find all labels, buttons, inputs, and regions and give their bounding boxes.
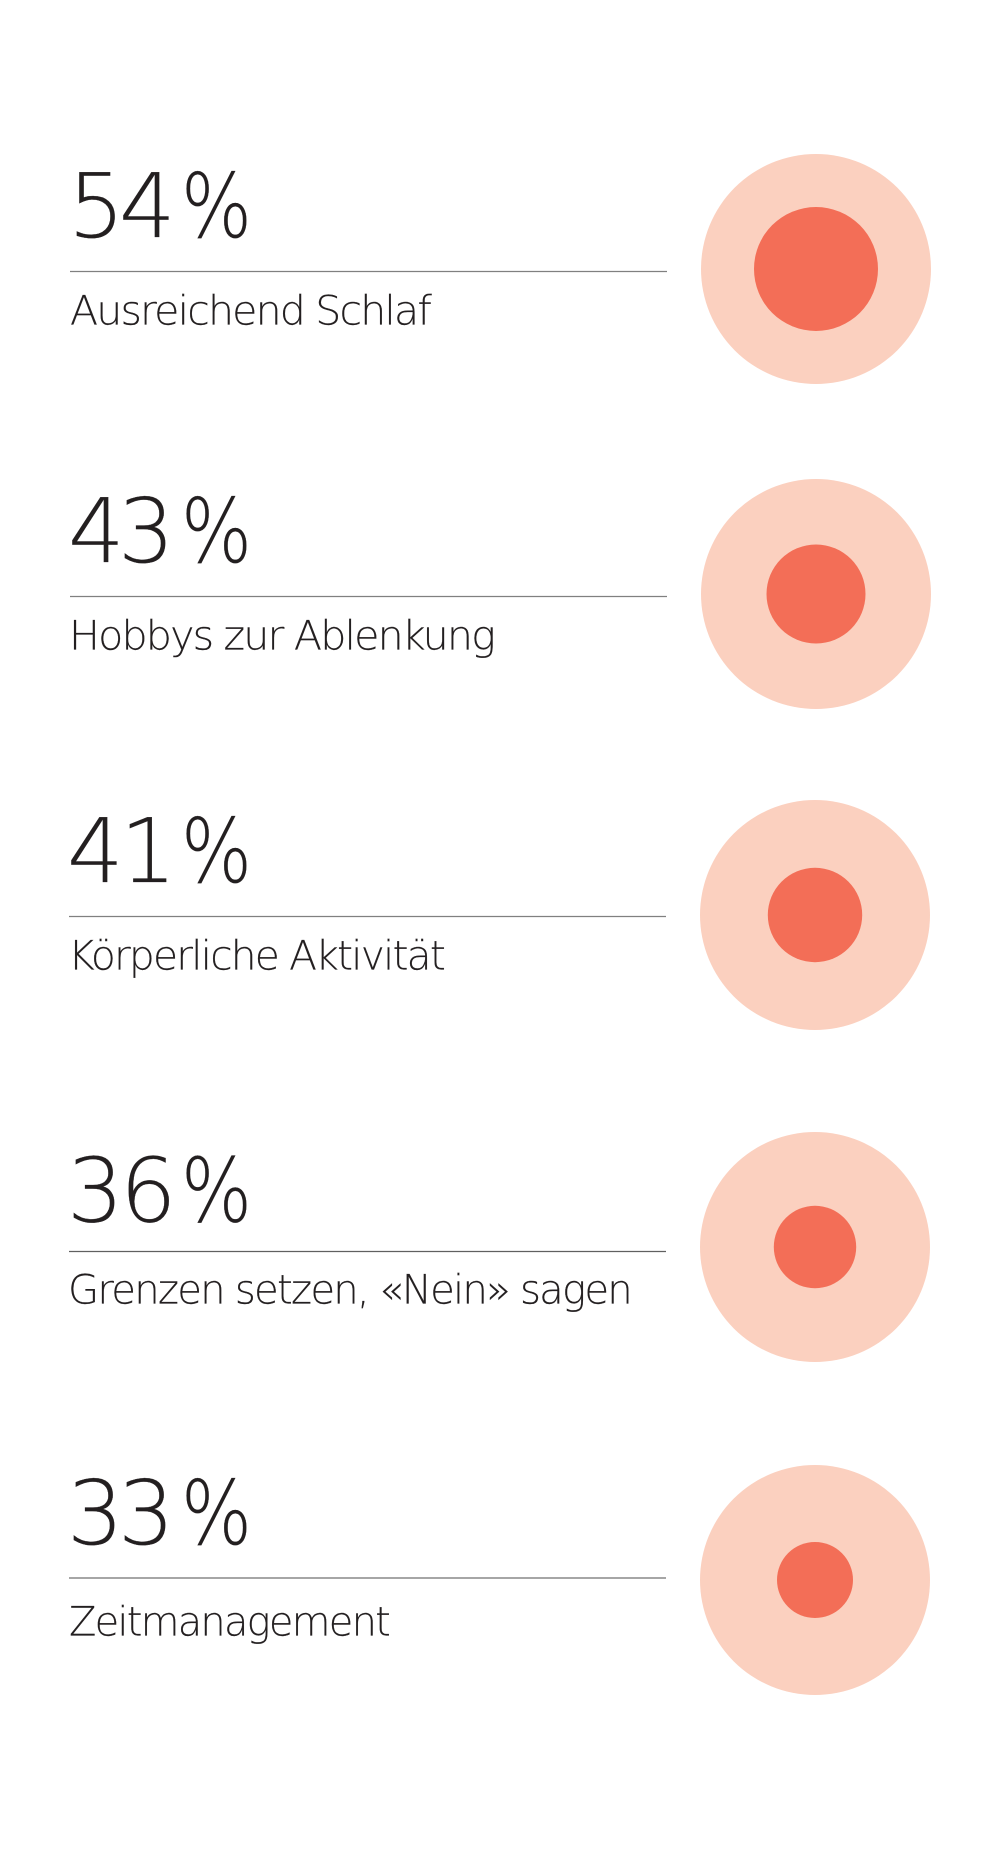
label: Grenzen setzen, «Nein» sagen: Grenzen setzen, «Nein» sagen <box>68 1266 631 1314</box>
bubble: 43 % <box>701 479 931 709</box>
value: 54 % <box>68 154 252 258</box>
value: 41 %: % <box>181 799 252 903</box>
row: 43% Hobbys zur Ablenkung <box>68 479 931 709</box>
value: 43 %: % <box>181 479 252 583</box>
value: 54 %: % <box>181 154 252 258</box>
bubble: 36 % <box>700 1132 930 1362</box>
row: 36% Grenzen setzen, «Nein» sagen <box>67 1132 930 1362</box>
value: 36 % <box>67 1138 252 1242</box>
value: 43 %: 43 <box>68 479 175 583</box>
label: Körperliche Aktivität: Körperliche Aktivität <box>68 932 444 980</box>
value: 54 %: 54 <box>68 154 176 258</box>
value: 41 %: 41 <box>67 799 177 903</box>
bubble: 54 % <box>701 154 931 384</box>
bubble: 33 % <box>700 1465 930 1695</box>
value: 33 %: 33 <box>67 1461 175 1565</box>
value: 33 % <box>67 1461 252 1565</box>
value: 36 %: 36 <box>67 1138 177 1242</box>
label: Zeitmanagement: Zeitmanagement <box>69 1598 389 1646</box>
value: 41 % <box>67 799 252 903</box>
row: 33% Zeitmanagement <box>67 1461 930 1695</box>
bubble: 41 % <box>700 800 930 1030</box>
value: 43 % <box>68 479 252 583</box>
value: 33 %: % <box>181 1461 252 1565</box>
value: 36 %: % <box>181 1138 252 1242</box>
label: Hobbys zur Ablenkung: Hobbys zur Ablenkung <box>69 612 494 660</box>
row: 41% Körperliche Aktivität <box>67 799 930 1030</box>
row: 54% Ausreichend Schlaf <box>68 154 931 384</box>
label: Ausreichend Schlaf: Ausreichend Schlaf <box>70 286 433 334</box>
